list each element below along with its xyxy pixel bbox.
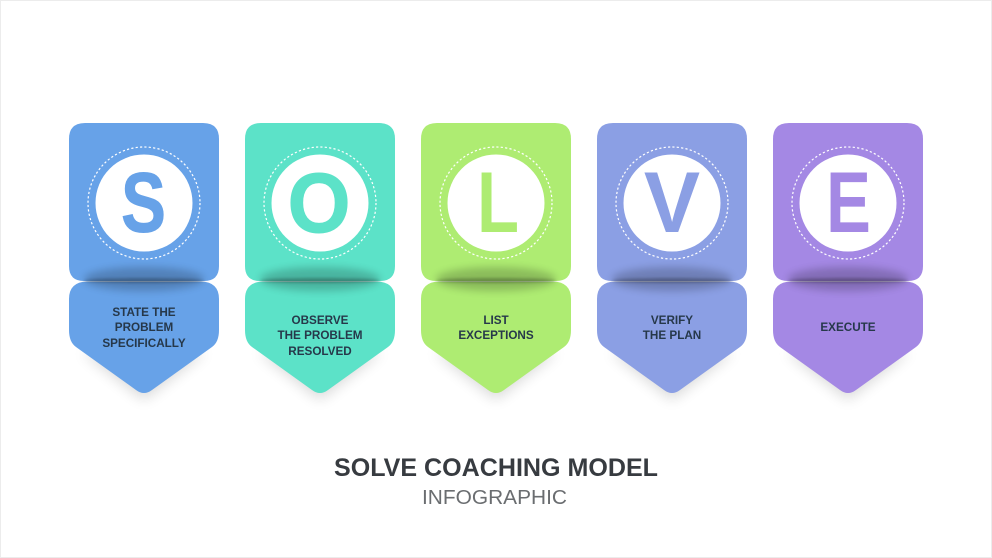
subtitle: INFOGRAPHIC bbox=[422, 487, 567, 509]
label: verify the plan: THE PLAN bbox=[643, 329, 701, 342]
letter O: O bbox=[288, 156, 350, 250]
label: state the problem specifically: STATE THE bbox=[112, 306, 176, 319]
panel: V - verify the plan bbox=[597, 123, 747, 400]
label: verify the plan: VERIFY bbox=[651, 314, 693, 327]
panel: L - list exceptions bbox=[421, 123, 571, 400]
letter S: S bbox=[121, 156, 166, 250]
title: SOLVE COACHING MODEL bbox=[334, 454, 658, 482]
panel: E - execute bbox=[773, 123, 923, 400]
label: observe the problem resolved: OBSERVE bbox=[292, 314, 349, 327]
label: list exceptions: LIST bbox=[483, 314, 510, 327]
letter E: E bbox=[826, 155, 871, 251]
panel: S - state the problem specifically bbox=[69, 123, 219, 400]
label: list exceptions: EXCEPTIONS bbox=[458, 329, 534, 342]
label: state the problem specifically: SPECIFICALLY bbox=[102, 337, 186, 350]
label: execute: EXECUTE bbox=[820, 321, 876, 334]
label: observe the problem resolved: RESOLVED bbox=[288, 345, 352, 358]
letter V: V bbox=[644, 155, 700, 251]
letter L: L bbox=[477, 155, 519, 251]
label: observe the problem resolved: THE PROBLEM bbox=[277, 329, 363, 342]
panel: O - observe the problem resolved bbox=[245, 123, 395, 400]
label: state the problem specifically: PROBLEM bbox=[115, 321, 173, 334]
